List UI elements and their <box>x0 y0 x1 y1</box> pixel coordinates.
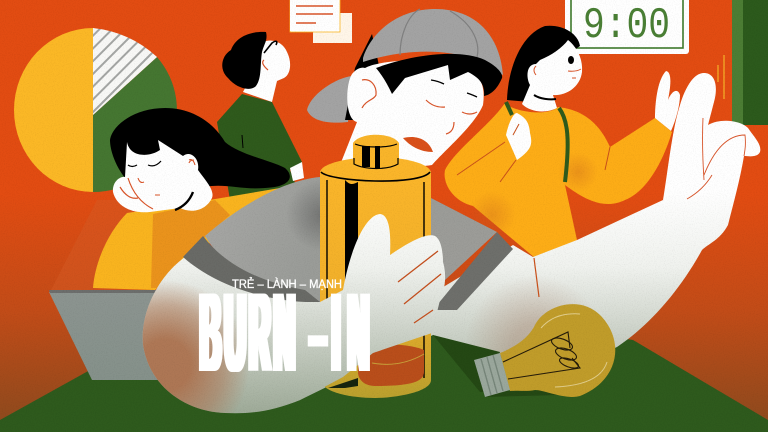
hand gripping bottle <box>240 214 445 412</box>
girl with backpack <box>445 26 680 258</box>
hair fringe <box>376 54 502 96</box>
cap <box>353 135 399 168</box>
hair <box>222 32 267 89</box>
sweater shading <box>468 191 516 239</box>
light bulb <box>474 304 615 397</box>
title <box>200 271 373 396</box>
subtitle: TRẺ – LÀNH – MẠNH <box>232 278 342 291</box>
cap crown <box>363 9 503 75</box>
floor <box>0 320 768 432</box>
yellow bottle <box>320 135 431 398</box>
glass highlights <box>541 314 607 387</box>
ear <box>362 80 376 108</box>
sleeve arm <box>290 162 304 181</box>
black stripes <box>345 180 358 305</box>
face <box>522 40 582 111</box>
sleeve band left <box>183 236 320 302</box>
title: I <box>332 271 344 396</box>
cap visor <box>307 76 352 123</box>
sticky notes <box>290 0 352 43</box>
hand on strap <box>506 113 531 160</box>
facial lines <box>138 160 195 195</box>
orange liquid <box>358 344 424 386</box>
boy head and cap <box>307 9 503 166</box>
backpack straps <box>506 102 568 182</box>
pie chart <box>14 28 177 192</box>
sleeve creases <box>457 142 610 182</box>
hair back <box>345 34 380 120</box>
green shirt <box>217 94 302 200</box>
sleeping girl <box>93 108 290 290</box>
laptop screen glow <box>50 200 160 292</box>
laptop <box>49 290 160 380</box>
neck and face <box>243 40 290 102</box>
closed eyes and mouth <box>431 80 477 97</box>
door <box>732 0 768 125</box>
bottle shoulder line <box>321 172 430 181</box>
rust shading near bulb <box>465 275 620 355</box>
motion lines <box>718 55 724 99</box>
eye <box>568 56 574 64</box>
finger creases <box>687 118 745 199</box>
bulb floor shadow <box>433 335 560 397</box>
hair <box>110 108 290 188</box>
grey t-shirt <box>183 177 513 310</box>
title: – <box>310 271 330 396</box>
rust shading left <box>143 257 262 413</box>
face <box>340 60 484 166</box>
sleeve band right <box>433 232 513 310</box>
wall clock: 9:00 <box>583 1 670 51</box>
raised hand <box>655 71 680 131</box>
bulb screw base <box>474 353 510 397</box>
man with glasses looking up <box>217 32 304 200</box>
face <box>113 140 213 212</box>
yellow sweater <box>445 103 672 258</box>
title: BURN <box>200 271 299 396</box>
hand under cheek <box>120 178 153 209</box>
big arm and raised hand <box>143 73 760 413</box>
shirt <box>93 188 280 290</box>
glasses <box>264 41 277 53</box>
filament <box>503 332 580 379</box>
hair <box>507 26 580 102</box>
title: N <box>348 271 373 396</box>
